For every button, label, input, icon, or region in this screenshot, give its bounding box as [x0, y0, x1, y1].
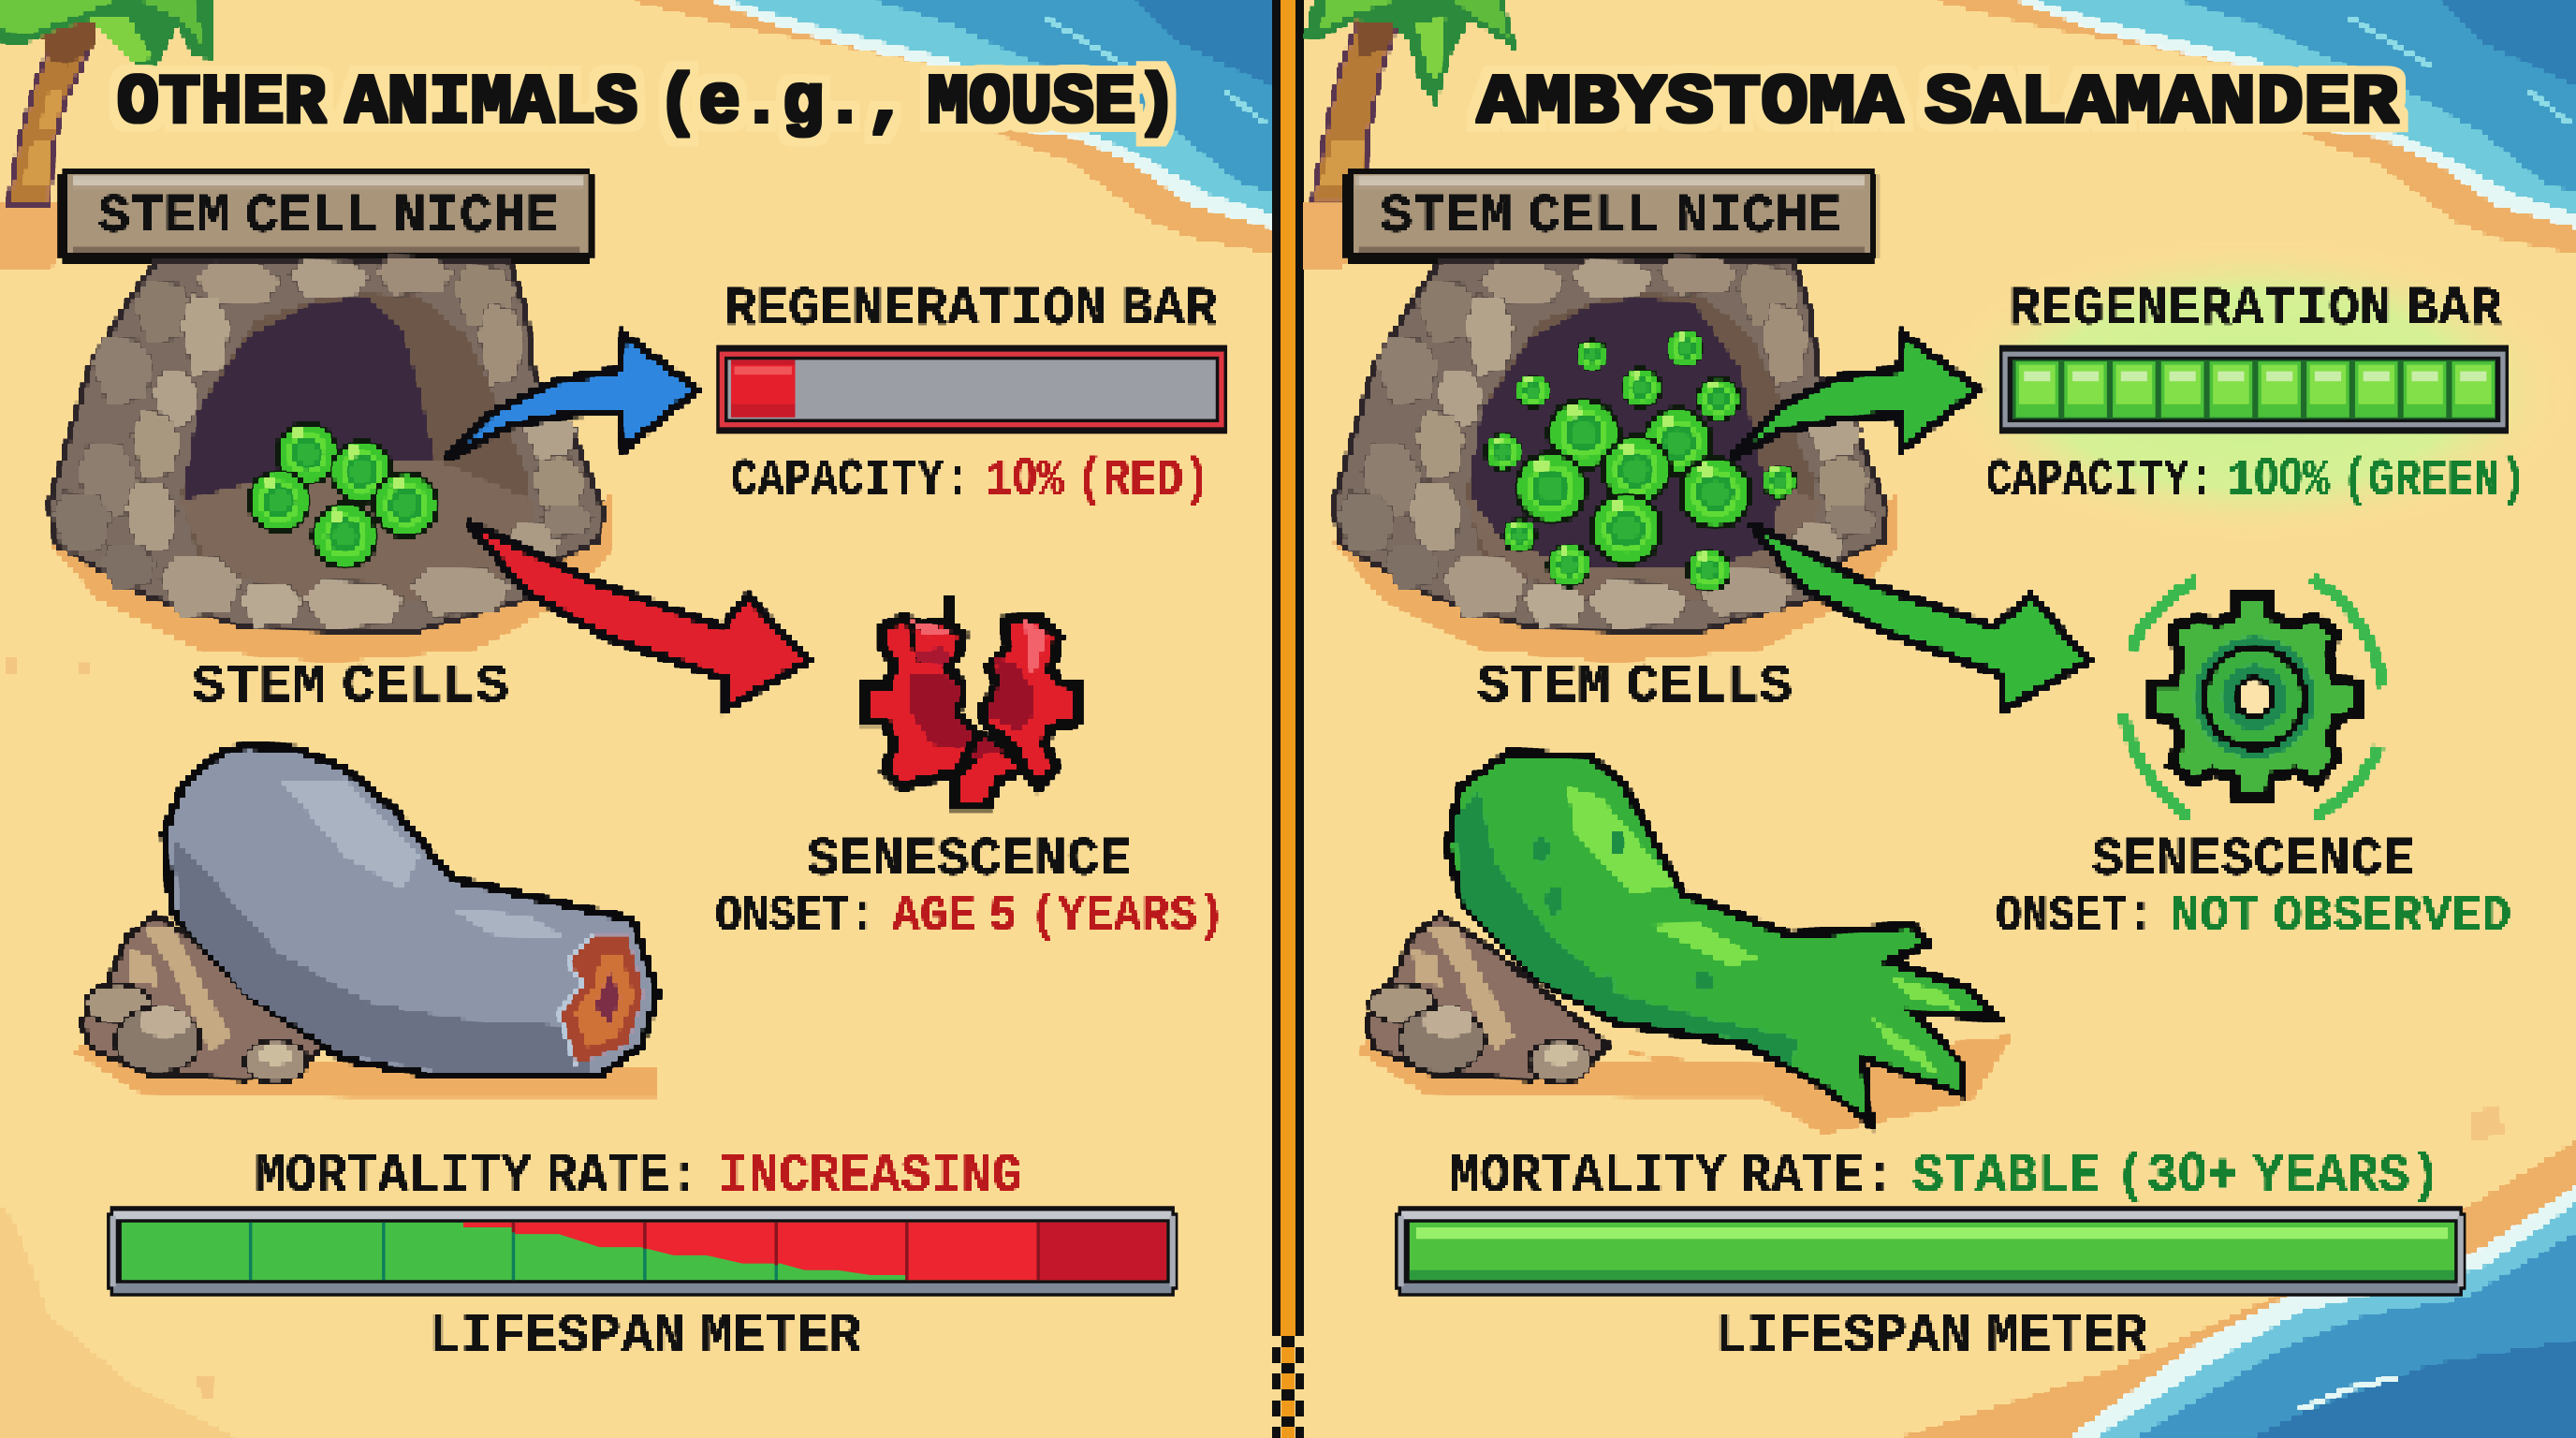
- panel: ambystoma salamander: [1305, 0, 2526, 1368]
- arrow: red to senescence gear: [468, 522, 809, 708]
- bar frame and 10 percent fill: [716, 345, 1227, 433]
- arrow: green to regeneration bar: [1732, 335, 1978, 459]
- mortality rate label: MORTALITY RATE:: [255, 1147, 700, 1208]
- senescence text: AGE 5 (YEARS): [892, 888, 1225, 946]
- panel: other animals: [0, 0, 1227, 1368]
- heading: ambystoma salamander: AMBYSTOMA SALAMANDER: [1477, 65, 2399, 143]
- sign: stem cell niche: [59, 168, 593, 263]
- heading: other animals: OTHER ANIMALS (e.g., MOUSE): [117, 65, 1178, 143]
- arrow: blue to regeneration bar: [446, 335, 696, 459]
- icon: stem cell cave with few cells: [50, 257, 611, 662]
- label: regeneration bar: REGENERATION BAR: [724, 280, 1217, 341]
- senescence text: [1996, 830, 2511, 946]
- sign: stem cell niche: STEM CELL NICHE: [97, 187, 559, 248]
- label: lifespan meter: LIFESPAN METER: [1715, 1307, 2147, 1368]
- label: stem cells: STEM CELLS: [192, 657, 509, 718]
- arrow: green to healthy gear: [1751, 524, 2088, 710]
- bar frame and 10 green segments: [1999, 345, 2509, 433]
- senescence text: SENESCENCE: [807, 830, 1132, 891]
- regeneration bar: low: [716, 280, 1227, 433]
- illustration: regenerated green limb: [1358, 753, 2012, 1134]
- senescence text: ONSET:: [715, 888, 876, 946]
- lifespan meter: full green: [1395, 1206, 2466, 1297]
- sign: stem cell niche: [1344, 168, 1878, 263]
- icon: intact green gear: [2123, 579, 2384, 817]
- regeneration bar: full: [1999, 280, 2509, 433]
- mortality rate label: [255, 1147, 1022, 1208]
- senescence text: SENESCENCE: [2091, 830, 2415, 891]
- senescence text: [715, 830, 1225, 946]
- icon: broken red gear: [864, 594, 1076, 806]
- senescence text: NOT OBSERVED: [2170, 888, 2511, 946]
- senescence text: ONSET:: [1996, 888, 2154, 946]
- label: regeneration bar: REGENERATION BAR: [2009, 280, 2502, 341]
- capacity readout: 10 percent: CAPACITY:: [731, 450, 971, 510]
- icon: stem cell cave full of cells: [1334, 257, 1895, 662]
- center divider: [1272, 0, 1304, 1438]
- mortality rate label: INCREASING: [718, 1147, 1022, 1208]
- capacity readout: 100 percent: 100% (GREEN): [2228, 447, 2526, 510]
- mortality rate label: STABLE (30+ YEARS): [1912, 1142, 2441, 1208]
- icon: palm tree: [1305, 0, 1518, 271]
- label: lifespan meter: LIFESPAN METER: [429, 1307, 861, 1368]
- capacity readout: 10 percent: [731, 447, 1210, 510]
- capacity readout: 100 percent: CAPACITY:: [1986, 450, 2215, 510]
- mortality rate label: MORTALITY RATE:: [1449, 1147, 1895, 1208]
- sign: stem cell niche: STEM CELL NICHE: [1380, 187, 1841, 248]
- capacity readout: 100 percent: [1986, 447, 2526, 510]
- illustration: gray stump limb: [74, 746, 657, 1097]
- lifespan meter: green to red: [107, 1206, 1178, 1297]
- icon: palm tree: [0, 0, 213, 271]
- mortality rate label: [1449, 1142, 2441, 1208]
- capacity readout: 10 percent: 10% (RED): [986, 447, 1210, 510]
- label: stem cells: STEM CELLS: [1477, 657, 1793, 718]
